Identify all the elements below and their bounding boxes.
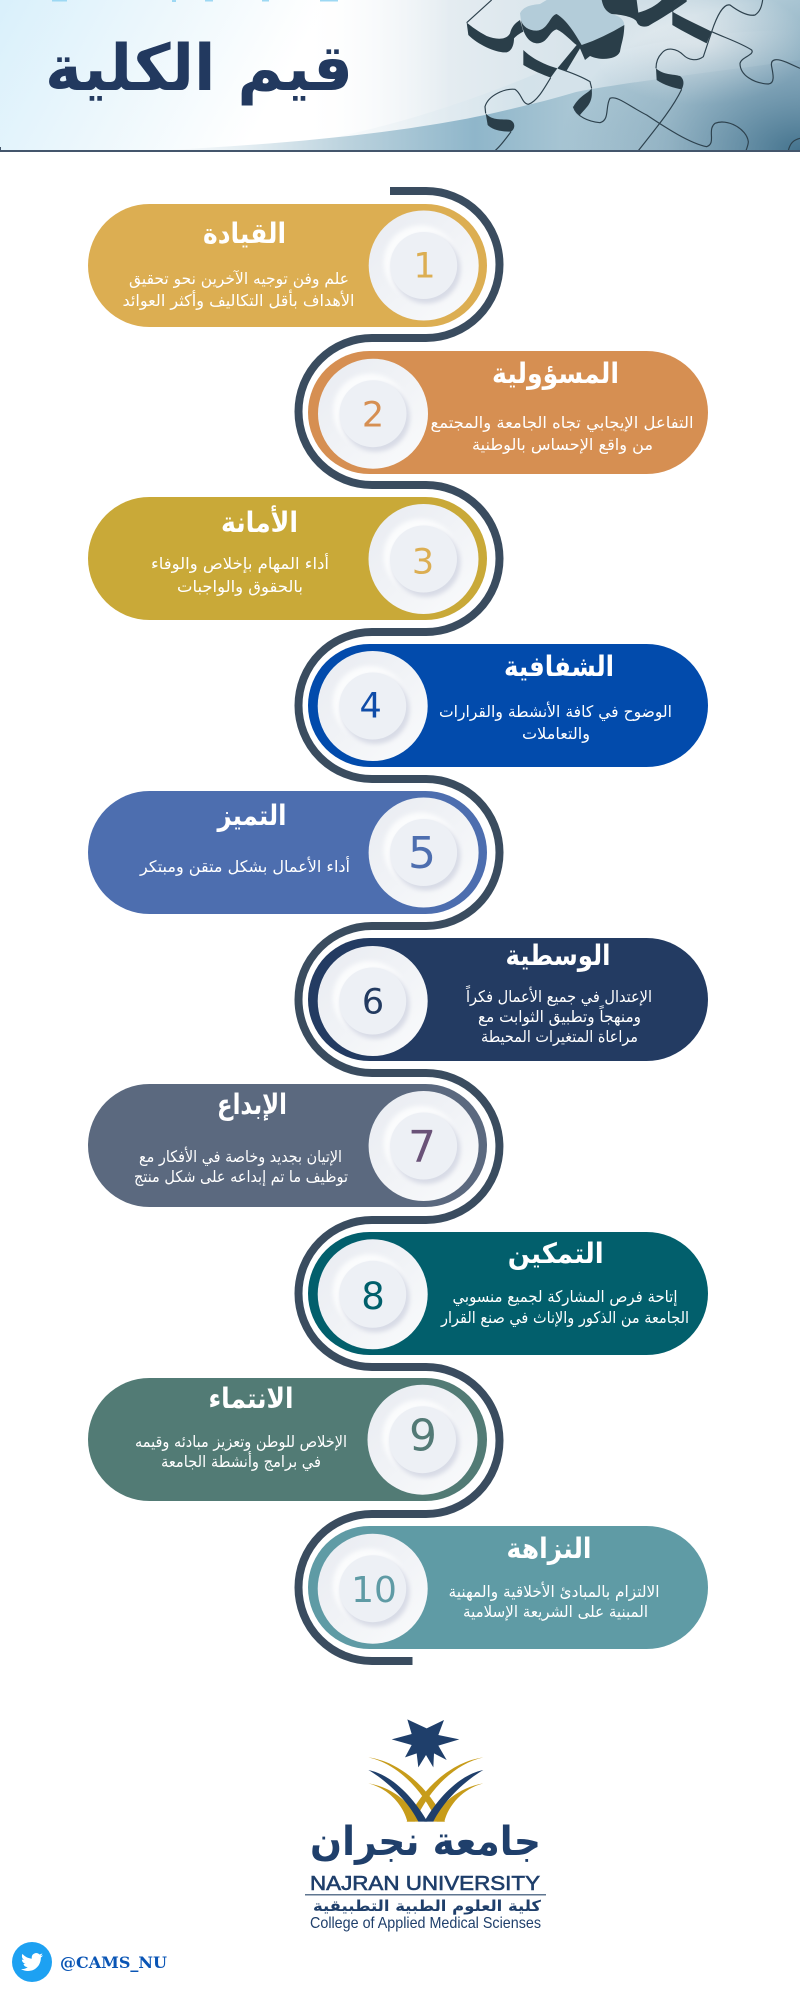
description <box>134 1146 348 1187</box>
heading: التميز <box>216 799 286 832</box>
heading: المسؤولية <box>492 357 619 390</box>
panel: value 3 honesty <box>88 497 487 620</box>
twitter handle: @CAMS_NU <box>60 1953 167 1972</box>
description <box>122 269 354 311</box>
panel: value 9 belonging <box>88 1378 487 1501</box>
description: من واقع الإحساس بالوطنية <box>472 435 653 455</box>
description <box>430 413 694 455</box>
description: الإعتدال في جميع الأعمال فكراً <box>465 984 652 1007</box>
number 2: 2 <box>362 396 384 436</box>
logo Arabic name: جامعة نجران <box>310 1819 541 1865</box>
description <box>465 984 652 1047</box>
description: ومنهجاً وتطبيق الثوابت مع <box>478 1004 641 1027</box>
logo English name: NAJRAN UNIVERSITY <box>310 1873 540 1895</box>
description: الأهداف بأقل التكاليف وأكثر العوائد <box>122 289 354 311</box>
panel: value 10 integrity <box>308 1526 708 1649</box>
description: المبنية على الشريعة الإسلامية <box>463 1602 648 1622</box>
description: إتاحة فرص المشاركة لجميع منسوبي <box>452 1287 678 1307</box>
panel: value 4 transparency <box>308 644 708 767</box>
description <box>135 1432 347 1472</box>
description: توظيف ما تم إبداعه على شكل منتج <box>134 1167 348 1187</box>
panel: value 5 excellence <box>88 791 487 914</box>
cropped heading fragment <box>52 0 338 2</box>
heading: التمكين <box>508 1237 604 1270</box>
panel: value 7 creativity <box>88 1084 487 1207</box>
main title: قيم الكلية <box>45 32 353 106</box>
description: الجامعة من الذكور والإناث في صنع القرار <box>440 1308 689 1328</box>
description <box>448 1581 660 1622</box>
description: والتعاملات <box>522 724 590 744</box>
logo rule <box>305 1894 546 1896</box>
description: علم وفن توجيه الآخرين نحو تحقيق <box>129 269 349 289</box>
number 6: 6 <box>362 982 384 1022</box>
description <box>440 1287 689 1328</box>
icon: twitter bird <box>12 1942 52 1982</box>
number 10: 10 <box>351 1570 397 1611</box>
heading: النزاهة <box>506 1532 592 1565</box>
description: أداء الأعمال بشكل متقن ومبتكر <box>139 856 350 877</box>
panel: value 2 responsibility <box>308 351 708 474</box>
serpentine connector line <box>298 191 500 1661</box>
description <box>151 553 329 597</box>
heading: الانتماء <box>208 1382 294 1415</box>
number 9: 9 <box>409 1410 437 1462</box>
description <box>439 701 672 744</box>
description: بالحقوق والواجبات <box>177 577 303 597</box>
puzzle pieces illustration <box>467 0 800 151</box>
description: مراعاة المتغيرات المحيطة <box>481 1027 638 1047</box>
logo emblem: star and palm arcs <box>368 1719 483 1822</box>
description: الوضوح في كافة الأنشطة والقرارات <box>439 701 672 722</box>
panel: value 6 patriotism <box>308 938 708 1061</box>
heading: القيادة <box>203 217 286 250</box>
number 4: 4 <box>359 686 382 726</box>
number 5: 5 <box>408 828 436 879</box>
panel: value 8 empowerment <box>308 1232 708 1355</box>
heading: الشفافية <box>504 650 614 683</box>
number 3: 3 <box>412 542 434 582</box>
heading: الإبداع <box>217 1088 287 1121</box>
number 8: 8 <box>361 1275 385 1318</box>
header bottom rule <box>0 147 800 152</box>
description: في برامج وأنشطة الجامعة <box>161 1451 321 1472</box>
panel: value 1 leadership <box>88 204 487 327</box>
heading: الوسطية <box>506 939 610 972</box>
heading: الأمانة <box>221 505 298 539</box>
description: أداء المهام بإخلاص والوفاء <box>151 553 329 574</box>
description: الإخلاص للوطن وتعزيز مبادئه وقيمه <box>135 1432 347 1452</box>
number 7: 7 <box>408 1122 436 1173</box>
logo college English: College of Applied Medical Scienses <box>310 1915 541 1932</box>
header banner <box>0 0 800 152</box>
university logo <box>305 1719 546 1932</box>
description: الإتيان بجديد وخاصة في الأفكار مع <box>139 1146 342 1167</box>
logo college Arabic: كلية العلوم الطبية التطبيقية <box>313 1897 541 1915</box>
description: التفاعل الإيجابي تجاه الجامعة والمجتمع <box>430 413 694 433</box>
number 1: 1 <box>413 246 436 286</box>
description: الالتزام بالمبادئ الأخلاقية والمهنية <box>448 1581 660 1602</box>
